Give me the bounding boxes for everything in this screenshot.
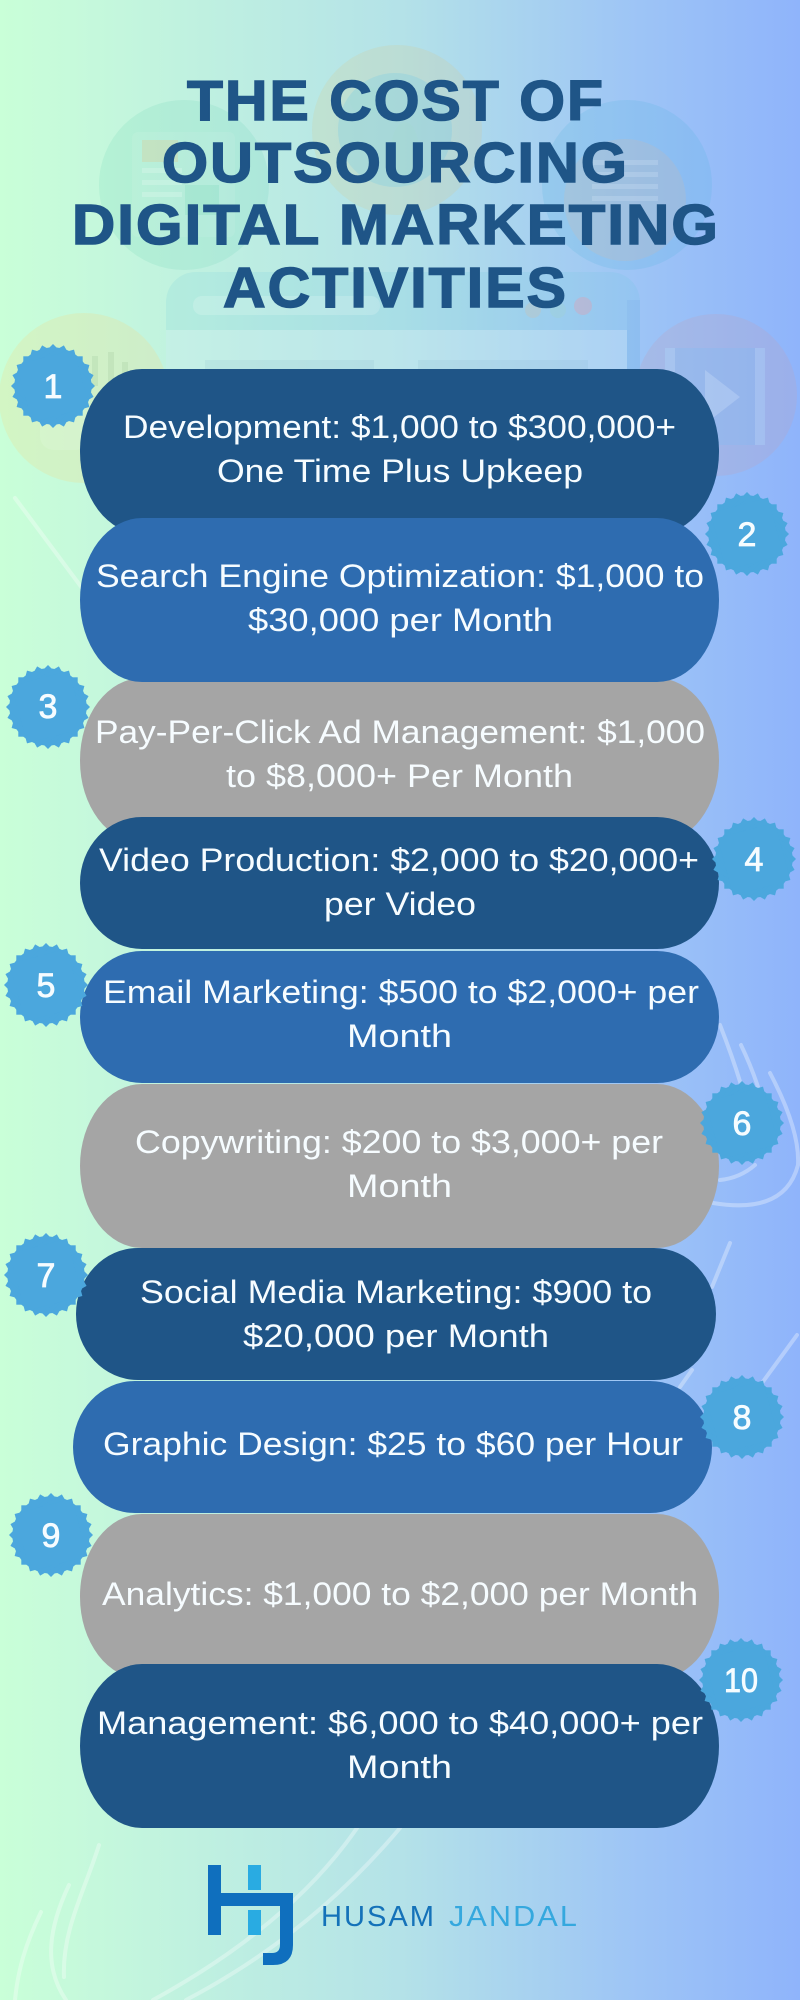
- badge 4: [712, 817, 796, 901]
- item 4: video production: per Video: [324, 886, 476, 922]
- icon: video circle: [635, 314, 797, 476]
- item 6: copywriting: [80, 1084, 719, 1248]
- item 5: email marketing: [80, 951, 719, 1083]
- item 5: email marketing: Month: [347, 1018, 452, 1054]
- item 2: search engine optimization: [80, 518, 719, 682]
- badge 10: 10: [724, 1662, 758, 1700]
- badge 8: 8: [733, 1399, 751, 1437]
- icon: document circle: [99, 100, 269, 270]
- item 2: search engine optimization: $30,000 per Month: [248, 602, 553, 638]
- badge 5: [4, 943, 88, 1027]
- item 8: graphic design: Graphic Design: $25 to $60 per Hour: [103, 1426, 683, 1462]
- badge 6: [700, 1081, 784, 1165]
- icon: article circle: [542, 100, 712, 270]
- badge 10: [699, 1638, 783, 1722]
- badge 3: [6, 665, 90, 749]
- title: OUTSOURCING: [162, 131, 629, 195]
- decorative swirl lines: [15, 498, 798, 2000]
- badge 5: 5: [37, 967, 55, 1005]
- badge 4: 4: [745, 841, 763, 879]
- badge 8: [700, 1375, 784, 1459]
- icon: globe circle: [312, 45, 482, 215]
- item 7: social media marketing: $20,000 per Month: [243, 1318, 549, 1354]
- badge 7: 7: [37, 1257, 55, 1295]
- title: [72, 69, 720, 320]
- item 4: video production: [80, 817, 719, 949]
- item 3: pay-per-click: to $8,000+ Per Month: [226, 758, 573, 794]
- badge 2: 2: [738, 516, 756, 554]
- badge 3: 3: [39, 688, 57, 726]
- item 1: development: [80, 369, 719, 534]
- icon: chat circle: [0, 313, 169, 483]
- faded background illustration: [0, 45, 797, 483]
- item 7: social media marketing: Social Media Marketing: $900 to: [140, 1274, 652, 1310]
- badge 2: [705, 492, 789, 576]
- item 5: email marketing: Email Marketing: $500 to $2,000+ per: [103, 974, 699, 1010]
- badge 6: 6: [733, 1105, 751, 1143]
- item 2: search engine optimization: Search Engine Optimization: $1,000 to: [96, 558, 704, 594]
- icon: HJ monogram: [208, 1865, 293, 1965]
- item 9: analytics: Analytics: $1,000 to $2,000 per Month: [102, 1576, 698, 1612]
- badge 9: [9, 1493, 93, 1577]
- title: THE COST OF: [187, 69, 605, 133]
- logo: HJ mark and Husam Jandal wordmark: [208, 1865, 579, 1965]
- item 10: management: Month: [347, 1749, 452, 1785]
- item 6: copywriting: Copywriting: $200 to $3,000+ per: [135, 1124, 663, 1160]
- item 10: management: Management: $6,000 to $40,000+ per: [97, 1705, 703, 1741]
- item 6: copywriting: Month: [347, 1168, 452, 1204]
- wordmark: HUSAM: [321, 1901, 436, 1933]
- badge 1: [11, 344, 95, 428]
- item 1: development: Development: $1,000 to $300,000+: [123, 409, 676, 445]
- wordmark: JANDAL: [449, 1901, 579, 1933]
- badge 9: 9: [42, 1517, 60, 1555]
- badge 7: [4, 1233, 88, 1317]
- item 9: analytics: [80, 1514, 719, 1679]
- item 4: video production: Video Production: $2,000 to $20,000+: [99, 842, 699, 878]
- item 8: graphic design: [73, 1381, 712, 1513]
- item 10: management: [80, 1664, 719, 1828]
- item 3: pay-per-click: Pay-Per-Click Ad Management: $1,000: [95, 714, 705, 750]
- item 3: pay-per-click: [80, 678, 719, 843]
- item 7: social media marketing: [76, 1248, 716, 1380]
- title: ACTIVITIES: [223, 256, 568, 320]
- icon: browser window: [166, 272, 640, 440]
- wordmark: [321, 1901, 579, 1933]
- item 1: development: One Time Plus Upkeep: [217, 453, 583, 489]
- badge 1: 1: [44, 368, 62, 406]
- title: DIGITAL MARKETING: [72, 193, 720, 257]
